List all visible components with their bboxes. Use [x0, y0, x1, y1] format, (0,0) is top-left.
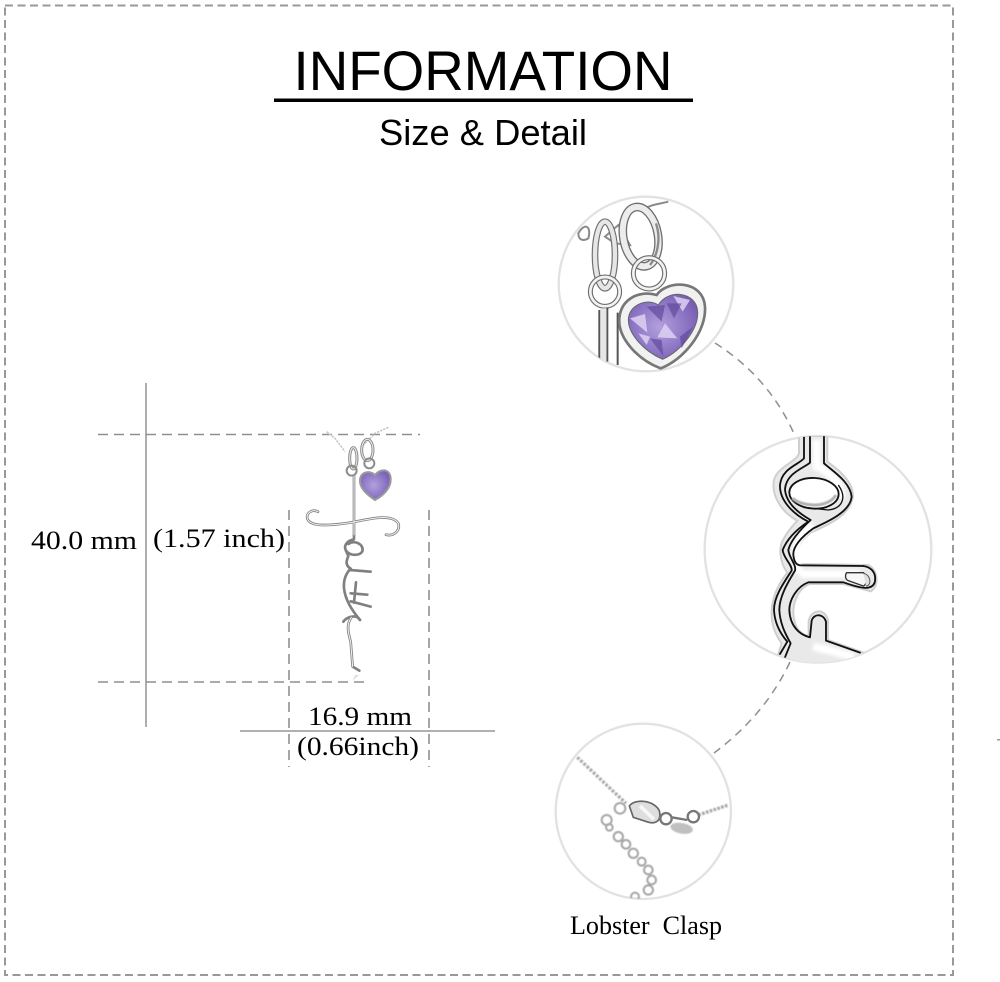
clasp — [629, 801, 660, 823]
height dimension lines — [98, 383, 420, 727]
jump rings — [590, 277, 620, 306]
ring links — [660, 811, 699, 824]
detail circle: lobster clasp — [556, 724, 731, 901]
cross and faith script — [307, 476, 399, 671]
heart gem — [360, 470, 391, 500]
height label inch: (1.57 inch) — [153, 524, 285, 553]
heart gem — [628, 294, 698, 359]
width label inch: (0.66inch) — [297, 732, 419, 761]
chain — [327, 427, 388, 452]
detail circle: heart gem — [559, 197, 733, 371]
detail circle: faith script — [705, 436, 931, 665]
pendant necklace — [307, 427, 399, 681]
extender chain — [602, 803, 656, 901]
letter o opening — [789, 477, 839, 510]
heart bail — [618, 204, 663, 269]
width dimension lines — [240, 510, 495, 767]
necklace chain — [577, 757, 728, 815]
stray mark — [997, 739, 1000, 740]
i dot end — [846, 573, 866, 586]
dark outlines — [774, 437, 875, 657]
silver body — [772, 436, 877, 665]
connector arc top — [715, 343, 795, 436]
clasp caption: Lobster Clasp — [570, 911, 722, 940]
chain links — [578, 202, 668, 245]
tag — [670, 822, 694, 834]
width label mm: 16.9 mm — [308, 702, 412, 731]
subtitle: Size & Detail — [379, 112, 587, 153]
cross stem — [599, 307, 618, 365]
title: INFORMATION — [294, 39, 672, 102]
highlights — [796, 440, 860, 657]
height label mm: 40.0 mm — [31, 526, 137, 555]
gem facets — [630, 296, 690, 345]
connector arc bottom — [714, 662, 790, 753]
fine bail — [595, 222, 615, 288]
heart setting — [619, 285, 705, 368]
bails — [347, 439, 374, 476]
reflection — [353, 675, 359, 681]
